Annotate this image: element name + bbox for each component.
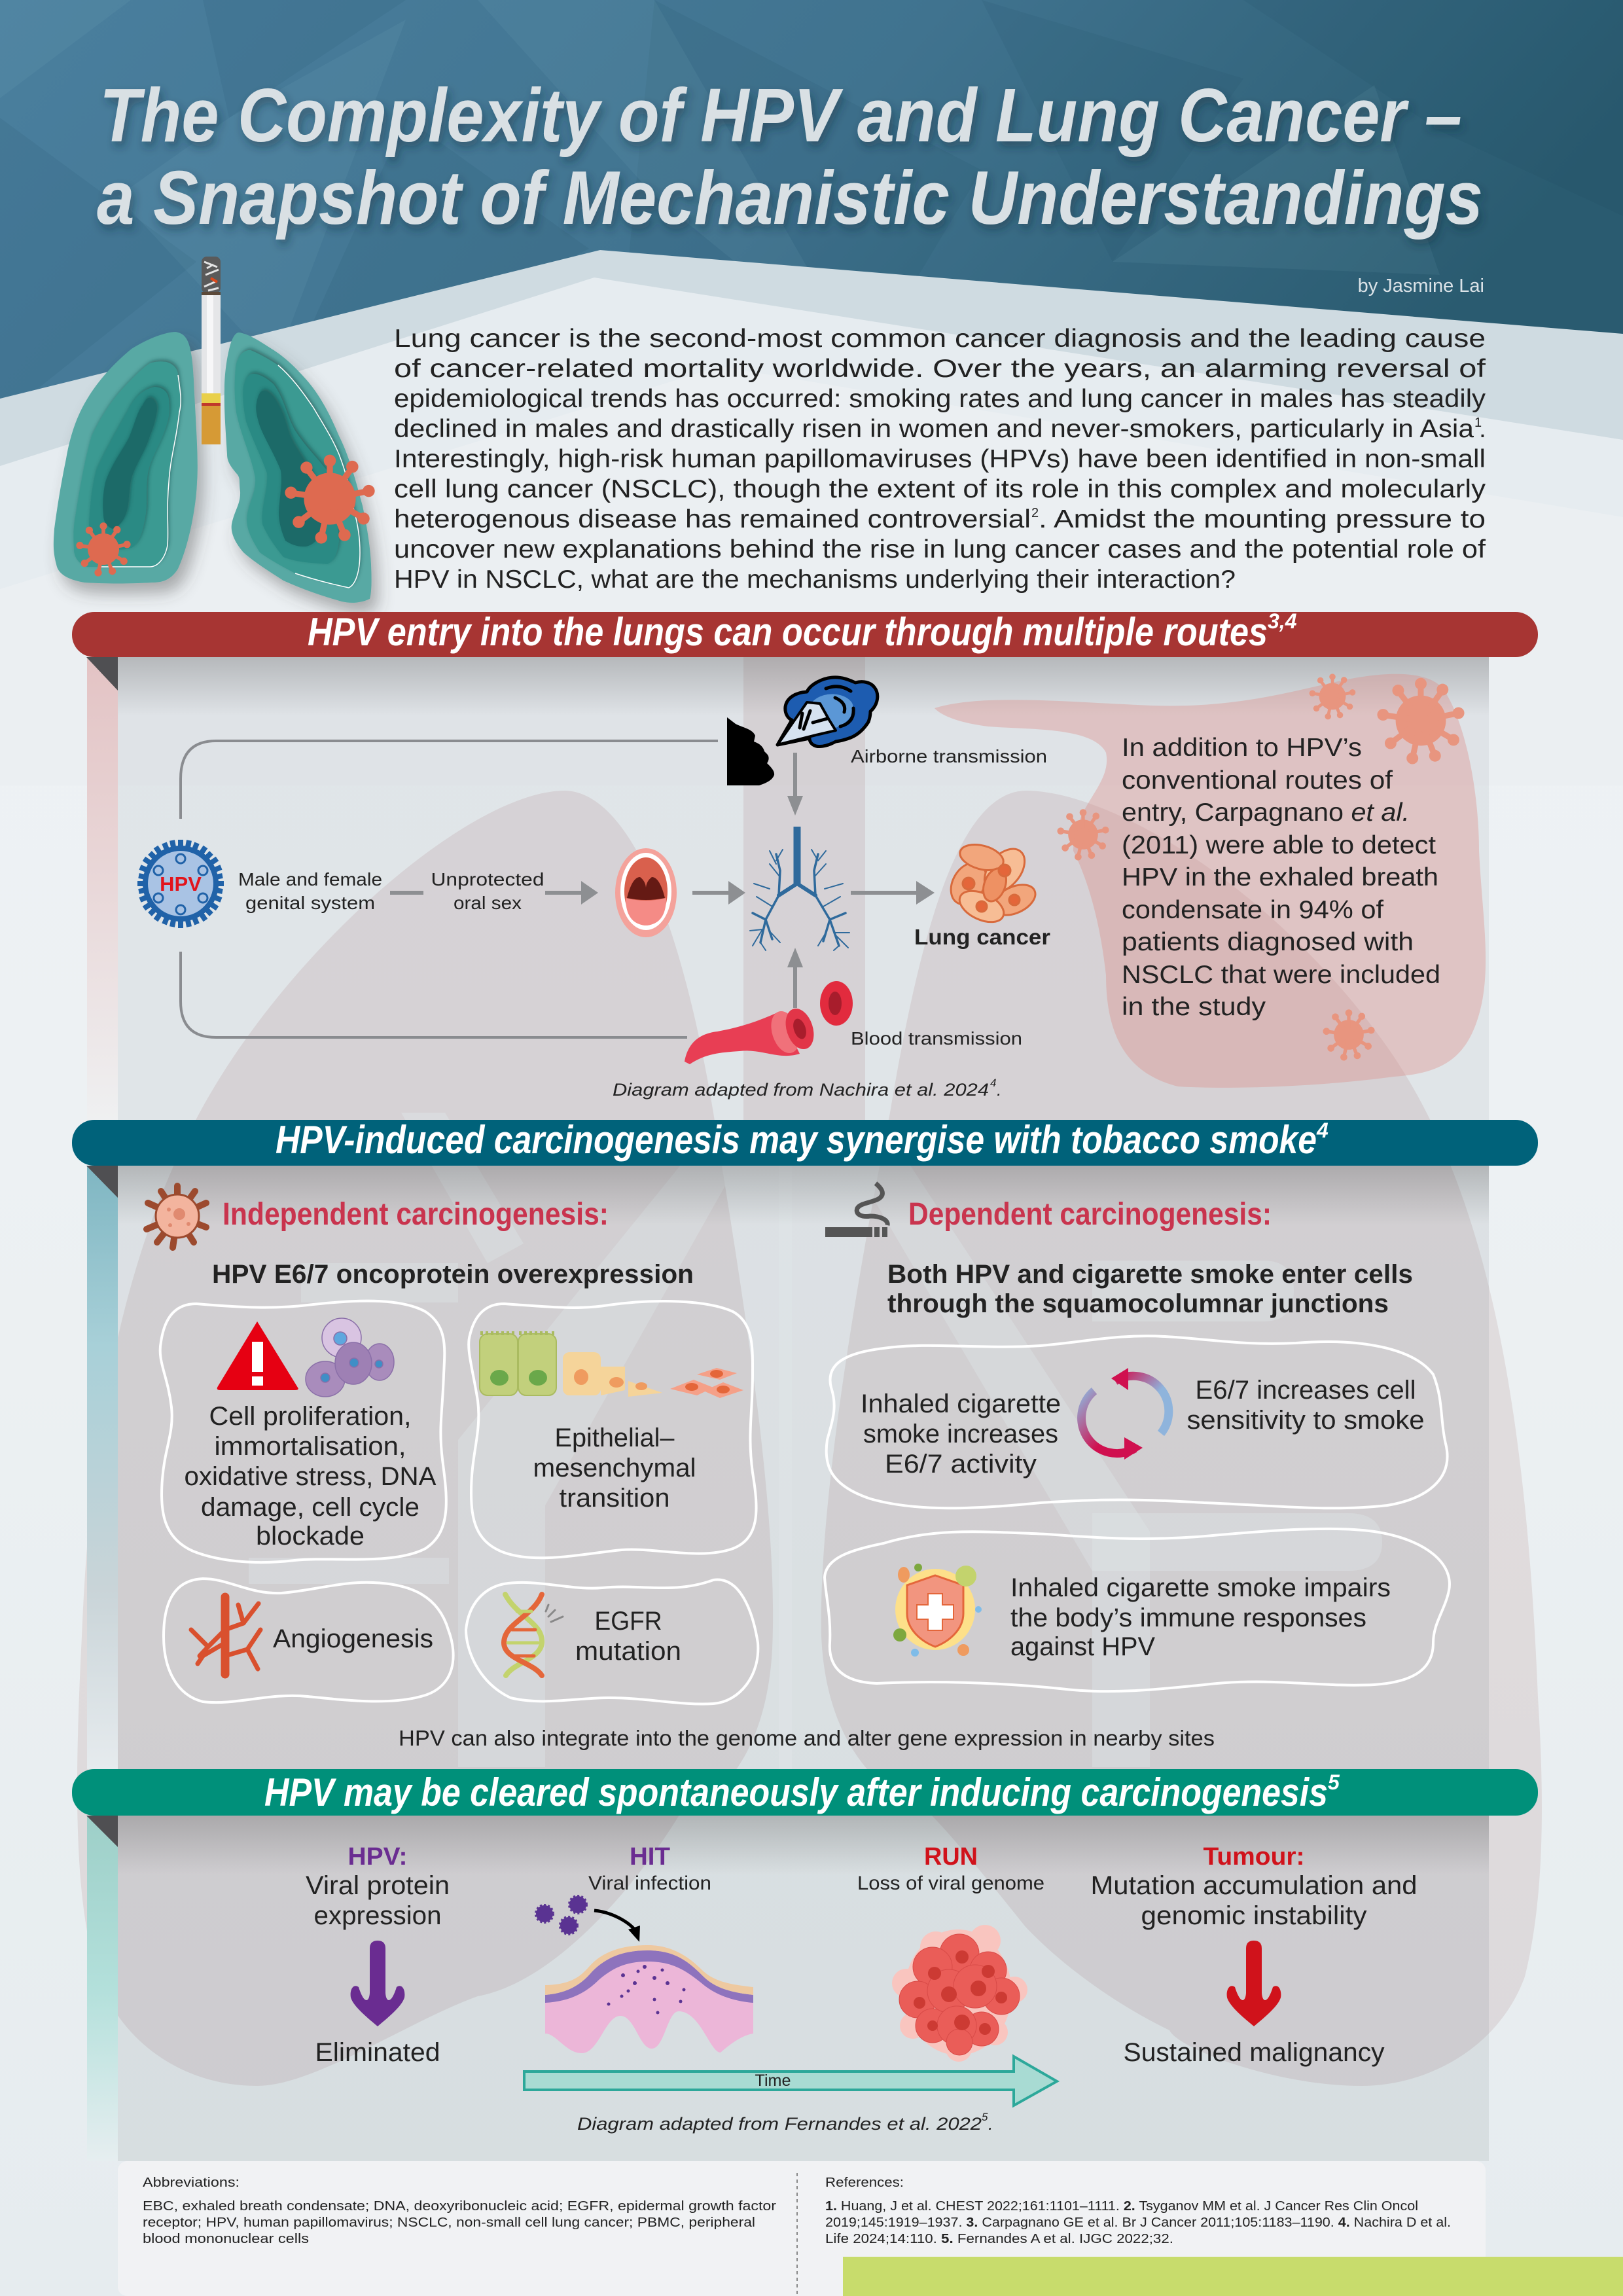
caption: 4 [990,1077,996,1089]
column: Tumour: Mutation accumulation and [1090,1871,1418,1900]
intro paragraph: epidemiological trends has occurred: smoking rates and lung cancer in males has steadily [394,385,1486,413]
icon: blood vessel [685,981,853,1064]
label: genital system [238,869,382,913]
route lines [181,741,718,1037]
icon: warning [217,1321,298,1390]
text: Inhaled cigarette [861,1390,1061,1418]
banner: clearance [72,1769,1538,1847]
subheading: through the squamocolumnar junctions [887,1289,1389,1318]
label: Angiogenesis [273,1624,433,1653]
arrow [545,881,598,905]
icon: shield [893,1564,982,1657]
intro paragraph: cell lung cancer (NSCLC), though the extent of its role in this complex and molecularly [394,475,1486,503]
icon: breath cloud [777,677,878,747]
text [1010,1573,1391,1661]
panel: independent carcinogenesis [147,1186,758,1704]
column: Tumour [1090,1843,1418,2067]
card text: mesenchymal [533,1454,696,1482]
text: against HPV [1010,1632,1155,1661]
banner: clearance: 5 [1328,1770,1340,1794]
column: RUN: RUN [924,1843,978,1871]
caption: . [997,1080,1002,1100]
label: unprotected oral sex: Unprotected [431,869,544,889]
icon: face silhouette [727,717,774,785]
icon: virus outline [147,1186,206,1247]
references: Life 2024;14:110. 5. Fernandes A et al. IJGC 2022;32. [825,2232,1173,2246]
title [97,73,1483,240]
label [575,1607,681,1666]
heading: Independent carcinogenesis: [223,1197,609,1232]
label: blood: Blood transmission [851,1028,1022,1049]
label: EGFR [594,1607,662,1636]
references: 2019;145:1919–1937. 3. Carpagnano GE et al. Br J Cancer 2011;105:1183–1190. 4. Nachira D et al. [825,2215,1451,2230]
icon: blood vessels [191,1597,260,1674]
panel: exhaled breath callout [935,673,1486,1088]
subheading [887,1260,1413,1318]
arrow: infection [594,1910,640,1942]
title: The Complexity of HPV and Lung Cancer – [99,73,1462,158]
banner: carcinogenesis: HPV-induced carcinogenesis may synergise with tobacco smoke [276,1118,1317,1162]
intro paragraph: 1 [1474,416,1482,430]
callout text: entry, Carpagnano et al. [1122,798,1410,827]
intro paragraph: HPV in NSCLC, what are the mechanisms underlying their interaction? [394,565,1236,594]
icon: HPV virus [137,840,224,928]
text: E6/7 increases cell [1195,1376,1416,1405]
intro paragraph: Interestingly, high-risk human papillomaviruses (HPVs) have been identified in non-small [394,445,1486,473]
text: Inhaled cigarette smoke impairs [1010,1573,1391,1602]
text [861,1390,1061,1479]
icon: epithelial cells transition [480,1331,743,1398]
label: mutation [575,1637,681,1666]
intro paragraph: . Amidst the mounting pressure to [1039,505,1486,533]
title: a Snapshot of Mechanistic Understandings [97,155,1483,240]
column: HIT: Viral infection [588,1873,711,1894]
icon: epidermis [545,1945,753,2053]
label: unprotected oral sex [431,869,544,913]
column: RUN: Loss of viral genome [857,1873,1044,1894]
panel: dependent carcinogenesis [825,1183,1450,1691]
icon: bronchial tree [750,827,849,950]
text: smoke increases [863,1420,1058,1448]
column: HPV: Viral protein [306,1871,450,1900]
intro paragraph: of cancer-related mortality worldwide. Over the years, an alarming reversal of [394,355,1486,383]
column: Tumour: Sustained malignancy [1123,2038,1385,2067]
arrow: dash [390,891,423,895]
callout text: patients diagnosed with [1122,928,1414,956]
label: airborne: Airborne transmission [851,746,1047,766]
text [1187,1376,1424,1435]
card text: immortalisation, [215,1432,406,1461]
green footer block [843,2257,1623,2296]
icon: lung cancer cells [944,840,1040,928]
panel: transmission routes diagram [137,673,1486,1100]
banner: entry routes [72,609,1538,691]
banner: entry routes: HPV entry into the lungs can occur through multiple routes [308,610,1268,654]
icon: small virus on lung [76,522,131,577]
references: 1. Huang, J et al. CHEST 2022;161:1101–1111. 2. Tsyganov MM et al. J Cancer Res Clin Oncol [825,2199,1418,2214]
cigarette [202,257,221,444]
callout text [1122,734,1440,1021]
abbreviations: Abbreviations: [143,2176,240,2190]
icon: virus on lung [285,455,375,544]
card text: blockade [256,1522,365,1551]
card text: damage, cell cycle [201,1493,419,1522]
icon: lungs with cigarette [54,257,375,603]
callout text: NSCLC that were included [1122,961,1440,989]
panel: footer [118,2161,1623,2296]
panel: content backgrounds [87,657,1489,2161]
text: E6/7 activity [885,1450,1037,1479]
caption: 5 [982,2111,988,2123]
column: HPV: Eliminated [315,2038,440,2067]
banner: carcinogenesis [72,1118,1538,1198]
card: feedback loop [827,1336,1448,1508]
card text: Cell proliferation, [209,1402,411,1431]
text: sensitivity to smoke [1187,1406,1424,1435]
arrow: blood up [787,948,803,1008]
label: genital system: genital system [245,893,375,913]
intro paragraph [394,325,1486,594]
icon: virions [536,1896,586,1934]
intro paragraph: Lung cancer is the second-most common cancer diagnosis and the leading cause [394,325,1486,353]
card text [533,1424,696,1513]
subheading: Both HPV and cigarette smoke enter cells [887,1260,1413,1289]
icon: cigarette smoke [825,1183,887,1237]
caption: Diagram adapted from Nachira et al. 2024 [613,1080,989,1100]
heading: Dependent carcinogenesis: [908,1197,1272,1232]
icon: HPV virus: HPV [160,872,202,895]
intro paragraph: heterogenous disease has remained controversial [394,505,1031,533]
caption: Diagram adapted from Fernandes et al. 2022 [577,2114,982,2134]
column: HPV [306,1843,450,2067]
card: EGFR [466,1580,758,1704]
card: immune impairment [825,1529,1450,1691]
card: angiogenesis [164,1579,454,1702]
card text [185,1402,437,1551]
references: References: [825,2176,904,2190]
icon: purple cells [306,1318,394,1397]
column: Tumour: Tumour: [1203,1843,1305,1871]
card text: transition [559,1484,670,1513]
label: lung cancer: Lung cancer [914,925,1050,949]
abbreviations: receptor; HPV, human papillomavirus; NSCLC, non-small cell lung cancer; PBMC, peripheral [143,2215,755,2230]
card text: Epithelial– [555,1424,675,1452]
arrow [692,881,745,905]
arrow: time [524,2056,1057,2106]
abbreviations: EBC, exhaled breath condensate; DNA, deoxyribonucleic acid; EGFR, epidermal growth factor [143,2199,776,2214]
icon: mouth [615,848,677,937]
callout text: HPV in the exhaled breath [1122,863,1438,891]
callout text: In addition to HPV’s [1122,734,1362,762]
banner: entry routes: 3,4 [1268,609,1297,633]
callout text: (2011) were able to detect [1122,831,1436,859]
abbreviations [143,2176,776,2246]
icon: DNA [504,1594,563,1676]
column: HPV: expression [314,1901,441,1930]
subheading: HPV E6/7 oncoprotein overexpression [212,1260,694,1289]
column: HPV: HPV: [348,1843,407,1871]
label: unprotected oral sex: oral sex [454,893,522,913]
callout text: condensate in 94% of [1122,896,1383,924]
callout text: in the study [1122,993,1266,1021]
intro paragraph: . [1479,415,1486,443]
giant lung backdrop [77,657,1542,2086]
card text: oxidative stress, DNA [185,1462,437,1491]
icon: tumour cluster [892,1925,1027,2062]
column: HIT [536,1843,753,2053]
arrow: purple down [351,1941,404,2026]
arrow: time: Time [755,2072,791,2090]
arrow: airborne down [787,753,803,816]
arrow [851,881,935,905]
column: RUN [857,1843,1044,2062]
abbreviations: blood mononuclear cells [143,2232,309,2246]
arrow: red down [1227,1941,1281,2026]
card: proliferation [160,1301,446,1562]
references [825,2176,1451,2246]
intro paragraph: declined in males and drastically risen in women and never-smokers, particularly in Asia [394,415,1474,443]
text: the body’s immune responses [1010,1604,1366,1632]
card: EMT [469,1301,757,1558]
icon: feedback cycle [1082,1368,1169,1460]
note: genome integration: HPV can also integrate into the genome and alter gene expression in nearby sites [399,1726,1215,1750]
callout text: conventional routes of [1122,766,1393,795]
label: genital system: Male and female [238,869,382,889]
panel: hit and run diagram [306,1843,1418,2134]
banner: carcinogenesis: 4 [1316,1119,1329,1142]
column: HIT: HIT [630,1843,670,1871]
byline: by Jasmine Lai [1358,276,1484,296]
column: Tumour: genomic instability [1141,1901,1366,1930]
intro paragraph: uncover new explanations behind the rise in lung cancer cases and the potential role of [394,535,1486,564]
banner: clearance: HPV may be cleared spontaneously after inducing carcinogenesis [264,1770,1328,1814]
intro paragraph: 2 [1031,506,1039,520]
caption: . [988,2114,993,2134]
